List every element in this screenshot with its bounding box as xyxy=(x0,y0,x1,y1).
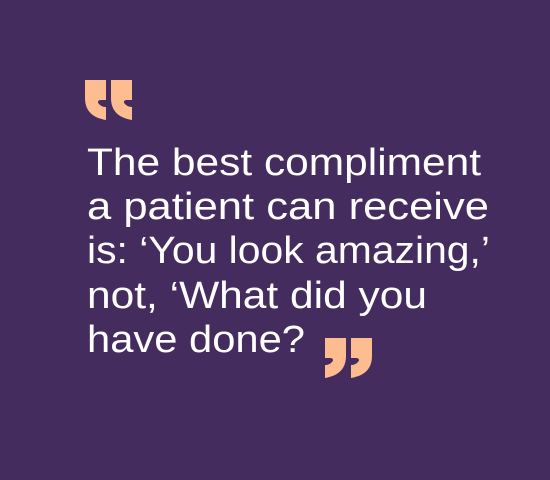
quote text: a patient can receive xyxy=(87,186,489,228)
icon: opening quotation marks xyxy=(85,80,132,120)
quote text: not, ‘What did you xyxy=(87,275,427,317)
quote text: The best compliment xyxy=(87,142,481,184)
quote text: have done? xyxy=(87,319,305,361)
quote text xyxy=(87,142,490,361)
icon: closing quotation marks xyxy=(325,338,372,378)
quote text: is: ‘You look amazing,’ xyxy=(87,230,490,272)
